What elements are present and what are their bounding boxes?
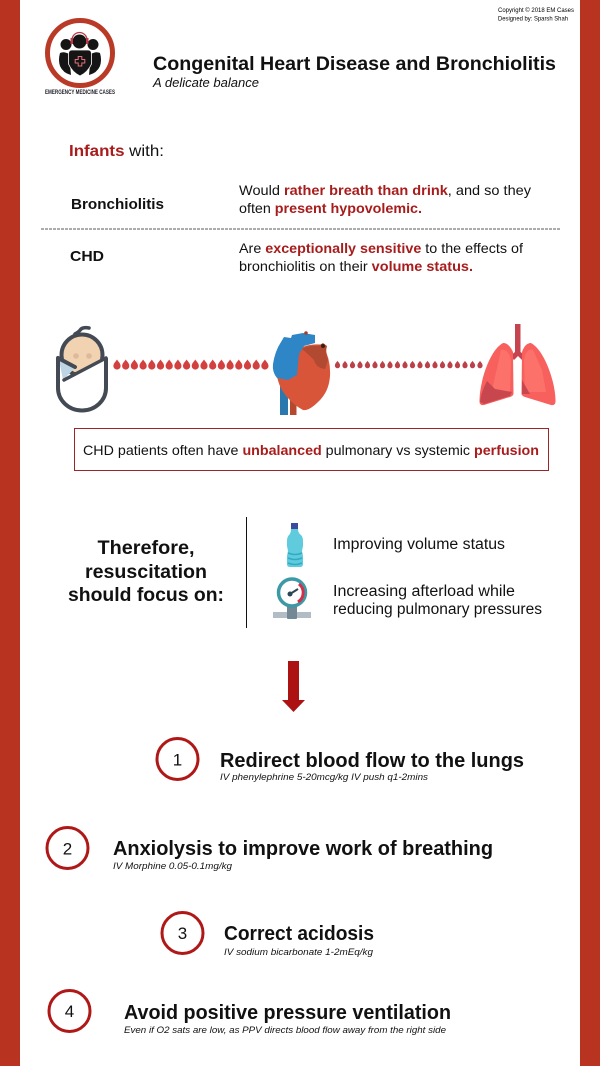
text: increasing afterload [333, 583, 542, 618]
arrow: down [282, 661, 305, 712]
text: increasing afterload: Increasing afterload while [333, 583, 515, 600]
step 3: IV sodium bicarbonate 1-2mEq/kg [224, 947, 373, 957]
step 4: Avoid positive pressure ventilation [124, 1002, 451, 1024]
drops: small blood flow [335, 361, 483, 368]
step 4: 4 [65, 1002, 74, 1021]
step 4: Even if O2 sats are low, as PPV directs blood flow away from the right side [124, 1025, 446, 1035]
step 2: 2 [63, 840, 72, 858]
row: CHD: Are exceptionally sensitive to the effects of [239, 240, 523, 256]
callout: unbalanced perfusion [74, 428, 548, 470]
heading: therefore [68, 538, 224, 606]
left border band [0, 0, 20, 1066]
text: increasing afterload: reducing pulmonary pressures [333, 601, 542, 618]
step 4 [49, 990, 451, 1035]
heading: therefore: resuscitation [85, 562, 207, 583]
step 1: IV phenylephrine 5-20mcg/kg IV push q1-2mins [220, 772, 429, 782]
logo: Emergency Medicine Cases: EMERGENCY MEDICINE CASES [45, 90, 115, 96]
step 1 [157, 738, 524, 782]
heading: infants with: Infants with: [69, 143, 164, 160]
text: improving volume status: Improving volume status [333, 536, 505, 553]
icon: lungs [479, 324, 556, 405]
step 2 [47, 828, 493, 871]
step 3: Correct acidosis [224, 923, 374, 945]
icon: heart [273, 331, 330, 415]
step 3 [162, 912, 374, 957]
right border band [580, 0, 600, 1066]
step 1: Redirect blood flow to the lungs [220, 750, 524, 772]
logo: Emergency Medicine Cases [45, 20, 115, 96]
row: CHD: bronchiolitis on their volume status. [239, 258, 473, 274]
row: bronchiolitis: Would rather breath than drink , and so they [239, 182, 531, 198]
icon: swaddled baby [58, 328, 106, 411]
icon: water bottle [287, 523, 303, 567]
drops: large blood flow [113, 360, 269, 370]
vertical divider [246, 517, 248, 628]
callout: unbalanced perfusion: CHD patients often have unbalanced pulmonary vs systemic perfusion [83, 442, 539, 458]
copyright note: Designed by: Sparsh Shah [498, 16, 568, 22]
row: CHD [70, 240, 523, 274]
row: bronchiolitis: Bronchiolitis [71, 196, 164, 213]
row: CHD: CHD [70, 248, 104, 265]
step 3: 3 [178, 924, 187, 943]
step 1: 1 [173, 750, 182, 770]
heading: therefore: should focus on: [68, 585, 224, 606]
title: Congenital Heart Disease and Bronchiolitis [153, 53, 556, 75]
subtitle: A delicate balance [152, 75, 259, 90]
step 2: IV Morphine 0.05-0.1mg/kg [113, 861, 232, 871]
step 2: Anxiolysis to improve work of breathing [113, 838, 493, 860]
heading: therefore: Therefore, [98, 538, 194, 559]
row: bronchiolitis [71, 182, 531, 216]
icon: pressure gauge [273, 579, 311, 619]
row: bronchiolitis: often present hypovolemic. [239, 200, 422, 216]
copyright note: Copyright © 2018 EM Cases [498, 7, 574, 14]
copyright note [498, 7, 574, 22]
